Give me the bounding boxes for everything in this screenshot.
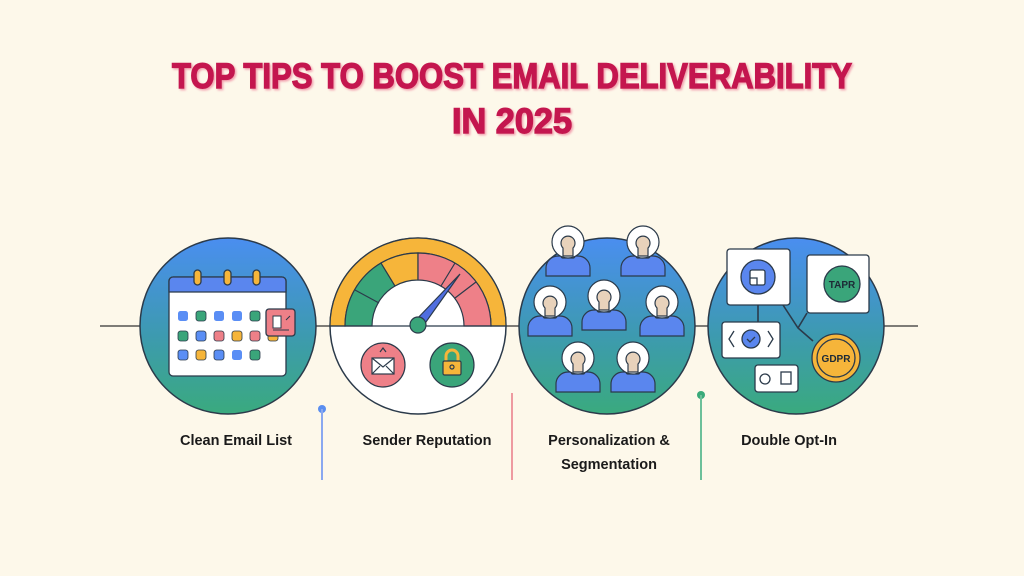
icon: GDPR badge [812,334,860,382]
labels: Sender Reputation [363,433,491,449]
labels: Personalization & [548,433,670,449]
icon: lock [430,343,474,387]
labels [180,433,837,473]
icon: GDPR badge: GDPR [822,354,851,365]
title [172,57,852,141]
labels: Clean Email List [180,433,292,449]
icon: gauge [330,238,506,333]
labels: Double Opt-In [741,433,837,449]
panel: sender reputation [330,238,506,414]
icon: app box [727,249,790,305]
connector: pink [511,393,513,480]
icon: toggle box [755,365,798,392]
connector: blue [318,405,326,480]
connector: green [697,391,705,480]
icon: check box [722,322,780,358]
title: IN 2025 [452,102,572,141]
panel: double opt-in [708,238,884,414]
icon: calendar [169,270,295,376]
title: TOP TIPS TO BOOST EMAIL DELIVERABILITY [172,57,852,96]
labels: Segmentation [561,457,657,473]
panel: clean email list [140,238,316,414]
panel: personalization [519,226,695,414]
icon: envelope [361,343,405,387]
icon: TAPR box: TAPR [829,280,856,291]
icon: TAPR box [807,255,869,313]
